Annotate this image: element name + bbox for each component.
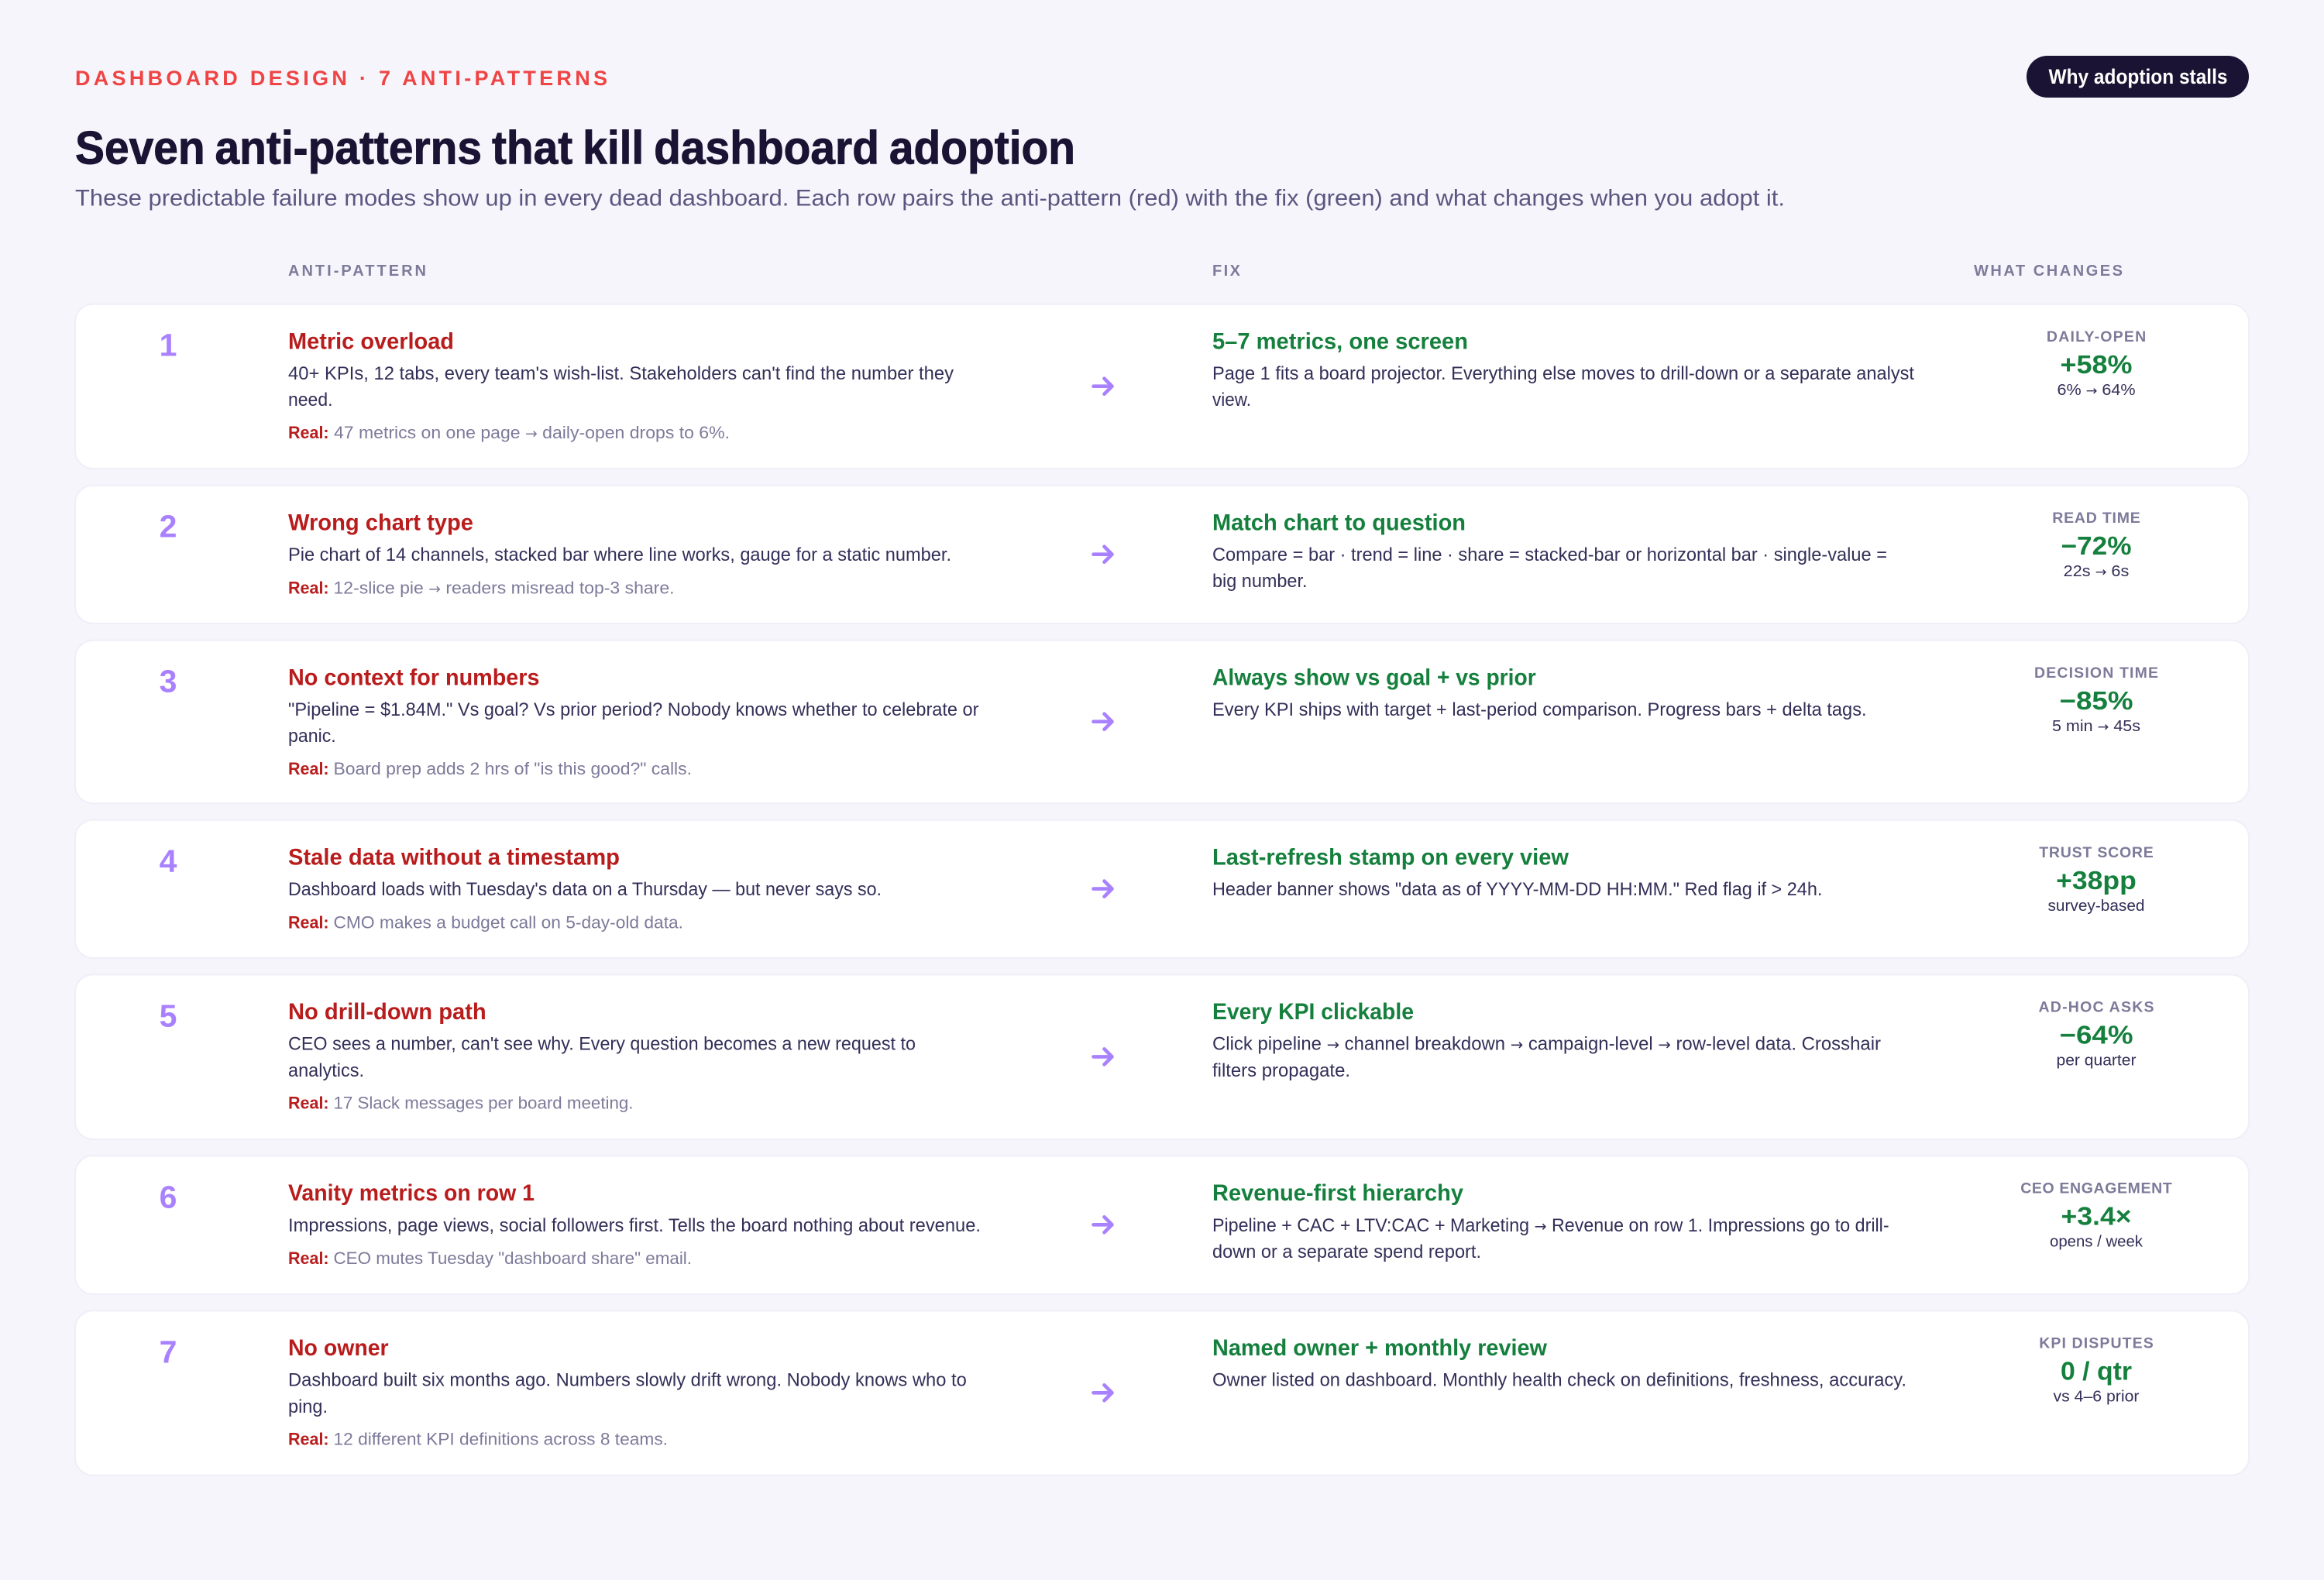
fix: Named owner + monthly review	[1212, 1335, 1547, 1361]
fix: Revenue-first hierarchy	[1212, 1180, 1464, 1206]
card background	[75, 304, 2249, 469]
arrow	[1094, 881, 1112, 897]
anti-pattern: Real:	[288, 1094, 329, 1113]
fix	[1212, 844, 1822, 900]
badge: why adoption stalls: Why adoption stalls	[2048, 65, 2228, 88]
anti-pattern: need.	[288, 390, 333, 410]
anti-pattern	[288, 999, 916, 1113]
column headers: ANTI-PATTERN	[288, 263, 426, 280]
arrow	[1094, 547, 1112, 562]
anti-pattern: CEO sees a number, can't see why. Every question becomes a new request to	[288, 1034, 916, 1055]
row number: 2	[160, 509, 177, 544]
what changes: vs 4–6 prior	[2053, 1388, 2140, 1406]
arrow	[1094, 379, 1112, 394]
what changes: 5 min → 45s	[2052, 717, 2140, 735]
anti-pattern	[288, 665, 979, 778]
anti-pattern: Real:	[288, 1249, 329, 1268]
anti-pattern: analytics.	[288, 1060, 364, 1081]
anti-pattern: No owner	[288, 1335, 389, 1361]
anti-pattern	[288, 1180, 981, 1268]
row 1: metric overload	[75, 304, 2249, 469]
row 6: vanity metrics	[75, 1156, 2249, 1294]
arrow	[1094, 714, 1112, 730]
anti-pattern: 12 different KPI definitions across 8 teams.	[333, 1430, 668, 1449]
anti-pattern: 47 metrics on one page → daily-open drops to 6%.	[334, 423, 730, 442]
what changes: −64%	[2059, 1021, 2133, 1049]
row number: 3	[160, 664, 177, 699]
what changes	[2034, 665, 2158, 735]
fix: down or a separate spend report.	[1212, 1242, 1481, 1262]
anti-pattern: "Pipeline = $1.84M." Vs goal? Vs prior period? Nobody knows whether to celebrate or	[288, 699, 979, 720]
what changes: −85%	[2059, 686, 2133, 715]
anti-pattern: Impressions, page views, social followers first. Tells the board nothing about revenue.	[288, 1215, 981, 1236]
what changes: KPI DISPUTES	[2039, 1335, 2154, 1352]
fix: Owner listed on dashboard. Monthly health check on definitions, freshness, accuracy.	[1212, 1370, 1906, 1391]
anti-pattern: 40+ KPIs, 12 tabs, every team's wish-list. Stakeholders can't find the number they	[288, 363, 954, 384]
row 2: wrong chart type	[75, 486, 2249, 623]
what changes	[2047, 328, 2146, 399]
what changes	[2020, 1180, 2172, 1251]
what changes: +38pp	[2056, 866, 2137, 895]
column headers	[288, 263, 2123, 280]
arrow	[1094, 1049, 1112, 1064]
anti-pattern: CMO makes a budget call on 5-day-old data.	[333, 912, 683, 932]
row number: 7	[160, 1334, 177, 1369]
title: Seven anti-patterns that kill dashboard adoption	[75, 122, 1075, 173]
what changes: CEO ENGAGEMENT	[2020, 1180, 2172, 1197]
eyebrow: DASHBOARD DESIGN · 7 ANTI-PATTERNS	[75, 67, 607, 90]
anti-pattern	[288, 844, 882, 932]
fix: Compare = bar · trend = line · share = stacked-bar or horizontal bar · single-value =	[1212, 544, 1887, 565]
column headers: WHAT CHANGES	[1974, 263, 2123, 280]
anti-pattern	[288, 1335, 967, 1449]
row number: 6	[160, 1179, 177, 1214]
fix	[1212, 510, 1887, 592]
card background	[75, 974, 2249, 1139]
anti-pattern: Wrong chart type	[288, 510, 473, 535]
fix: view.	[1212, 390, 1251, 410]
anti-pattern: panic.	[288, 726, 336, 747]
what changes: 6% → 64%	[2058, 381, 2135, 399]
anti-pattern: Real:	[288, 1430, 329, 1449]
anti-pattern: Vanity metrics on row 1	[288, 1180, 535, 1206]
what changes: 0 / qtr	[2061, 1357, 2132, 1386]
anti-pattern: Dashboard built six months ago. Numbers slowly drift wrong. Nobody knows who to	[288, 1370, 967, 1391]
row 7: no owner	[75, 1310, 2249, 1475]
anti-pattern: Board prep adds 2 hrs of "is this good?" calls.	[333, 759, 692, 778]
fix: filters propagate.	[1212, 1060, 1350, 1081]
what changes: 22s → 6s	[2064, 562, 2129, 580]
what changes: survey-based	[2048, 897, 2144, 915]
what changes: DECISION TIME	[2034, 665, 2158, 682]
anti-pattern: Metric overload	[288, 328, 454, 354]
what changes: −72%	[2061, 531, 2132, 560]
fix: Header banner shows "data as of YYYY-MM-DD HH:MM." Red flag if > 24h.	[1212, 879, 1822, 900]
fix: Always show vs goal + vs prior	[1212, 665, 1536, 690]
row 5: no drill-down path	[75, 974, 2249, 1139]
what changes: AD-HOC ASKS	[2039, 999, 2154, 1016]
anti-pattern: Stale data without a timestamp	[288, 844, 620, 870]
fix	[1212, 328, 1914, 410]
card background	[75, 1156, 2249, 1294]
what changes: per quarter	[2056, 1052, 2137, 1070]
what changes: READ TIME	[2052, 510, 2140, 527]
what changes: +3.4×	[2061, 1202, 2132, 1231]
what changes: DAILY-OPEN	[2047, 328, 2146, 345]
anti-pattern: Dashboard loads with Tuesday's data on a Thursday — but never says so.	[288, 879, 882, 900]
card background	[75, 486, 2249, 623]
what changes: TRUST SCORE	[2039, 844, 2154, 861]
what changes: +58%	[2061, 350, 2132, 379]
anti-pattern: No drill-down path	[288, 999, 486, 1025]
what changes	[2052, 510, 2140, 580]
fix: Click pipeline → channel breakdown → campaign-level → row-level data. Crosshair	[1212, 1034, 1881, 1055]
fix	[1212, 1180, 1889, 1262]
column headers: FIX	[1212, 263, 1241, 280]
fix	[1212, 999, 1881, 1081]
fix: Pipeline + CAC + LTV:CAC + Marketing → Revenue on row 1. Impressions go to drill-	[1212, 1215, 1889, 1236]
fix: 5–7 metrics, one screen	[1212, 328, 1468, 354]
row 4: stale data	[75, 820, 2249, 958]
arrow	[1094, 1385, 1112, 1400]
anti-pattern: Real:	[288, 912, 329, 932]
anti-pattern: Real:	[288, 578, 329, 597]
anti-pattern: Real:	[288, 759, 329, 778]
what changes	[2039, 1335, 2154, 1406]
card background	[75, 820, 2249, 958]
anti-pattern: CEO mutes Tuesday "dashboard share" email.	[333, 1249, 692, 1268]
anti-pattern	[288, 328, 954, 442]
anti-pattern: 17 Slack messages per board meeting.	[333, 1094, 634, 1113]
fix: Page 1 fits a board projector. Everything else moves to drill-down or a separate analyst	[1212, 363, 1914, 384]
subtitle: These predictable failure modes show up in every dead dashboard. Each row pairs the anti-pattern (red) with the fix (green) and what changes when you adopt it.	[75, 186, 1785, 211]
row number: 5	[160, 998, 177, 1033]
row 3: no context for numbers	[75, 641, 2249, 803]
anti-pattern: ping.	[288, 1396, 328, 1417]
row number: 1	[160, 328, 177, 363]
anti-pattern: No context for numbers	[288, 665, 539, 690]
card background	[75, 1310, 2249, 1475]
fix	[1212, 1335, 1906, 1391]
fix: Match chart to question	[1212, 510, 1466, 535]
anti-pattern: 12-slice pie → readers misread top-3 share.	[333, 578, 674, 597]
badge: why adoption stalls	[2027, 56, 2249, 98]
fix: big number.	[1212, 571, 1308, 592]
fix	[1212, 665, 1867, 720]
anti-pattern: Pie chart of 14 channels, stacked bar where line works, gauge for a static number.	[288, 544, 951, 565]
fix: Every KPI clickable	[1212, 999, 1414, 1025]
what changes	[2039, 844, 2154, 915]
fix: Last-refresh stamp on every view	[1212, 844, 1569, 870]
row number: 4	[160, 843, 177, 879]
card background	[75, 641, 2249, 803]
anti-pattern	[288, 510, 951, 597]
what changes: opens / week	[2050, 1233, 2144, 1251]
anti-pattern: Real:	[288, 423, 329, 442]
arrow	[1094, 1217, 1112, 1232]
fix: Every KPI ships with target + last-period comparison. Progress bars + delta tags.	[1212, 699, 1867, 720]
what changes	[2039, 999, 2154, 1070]
